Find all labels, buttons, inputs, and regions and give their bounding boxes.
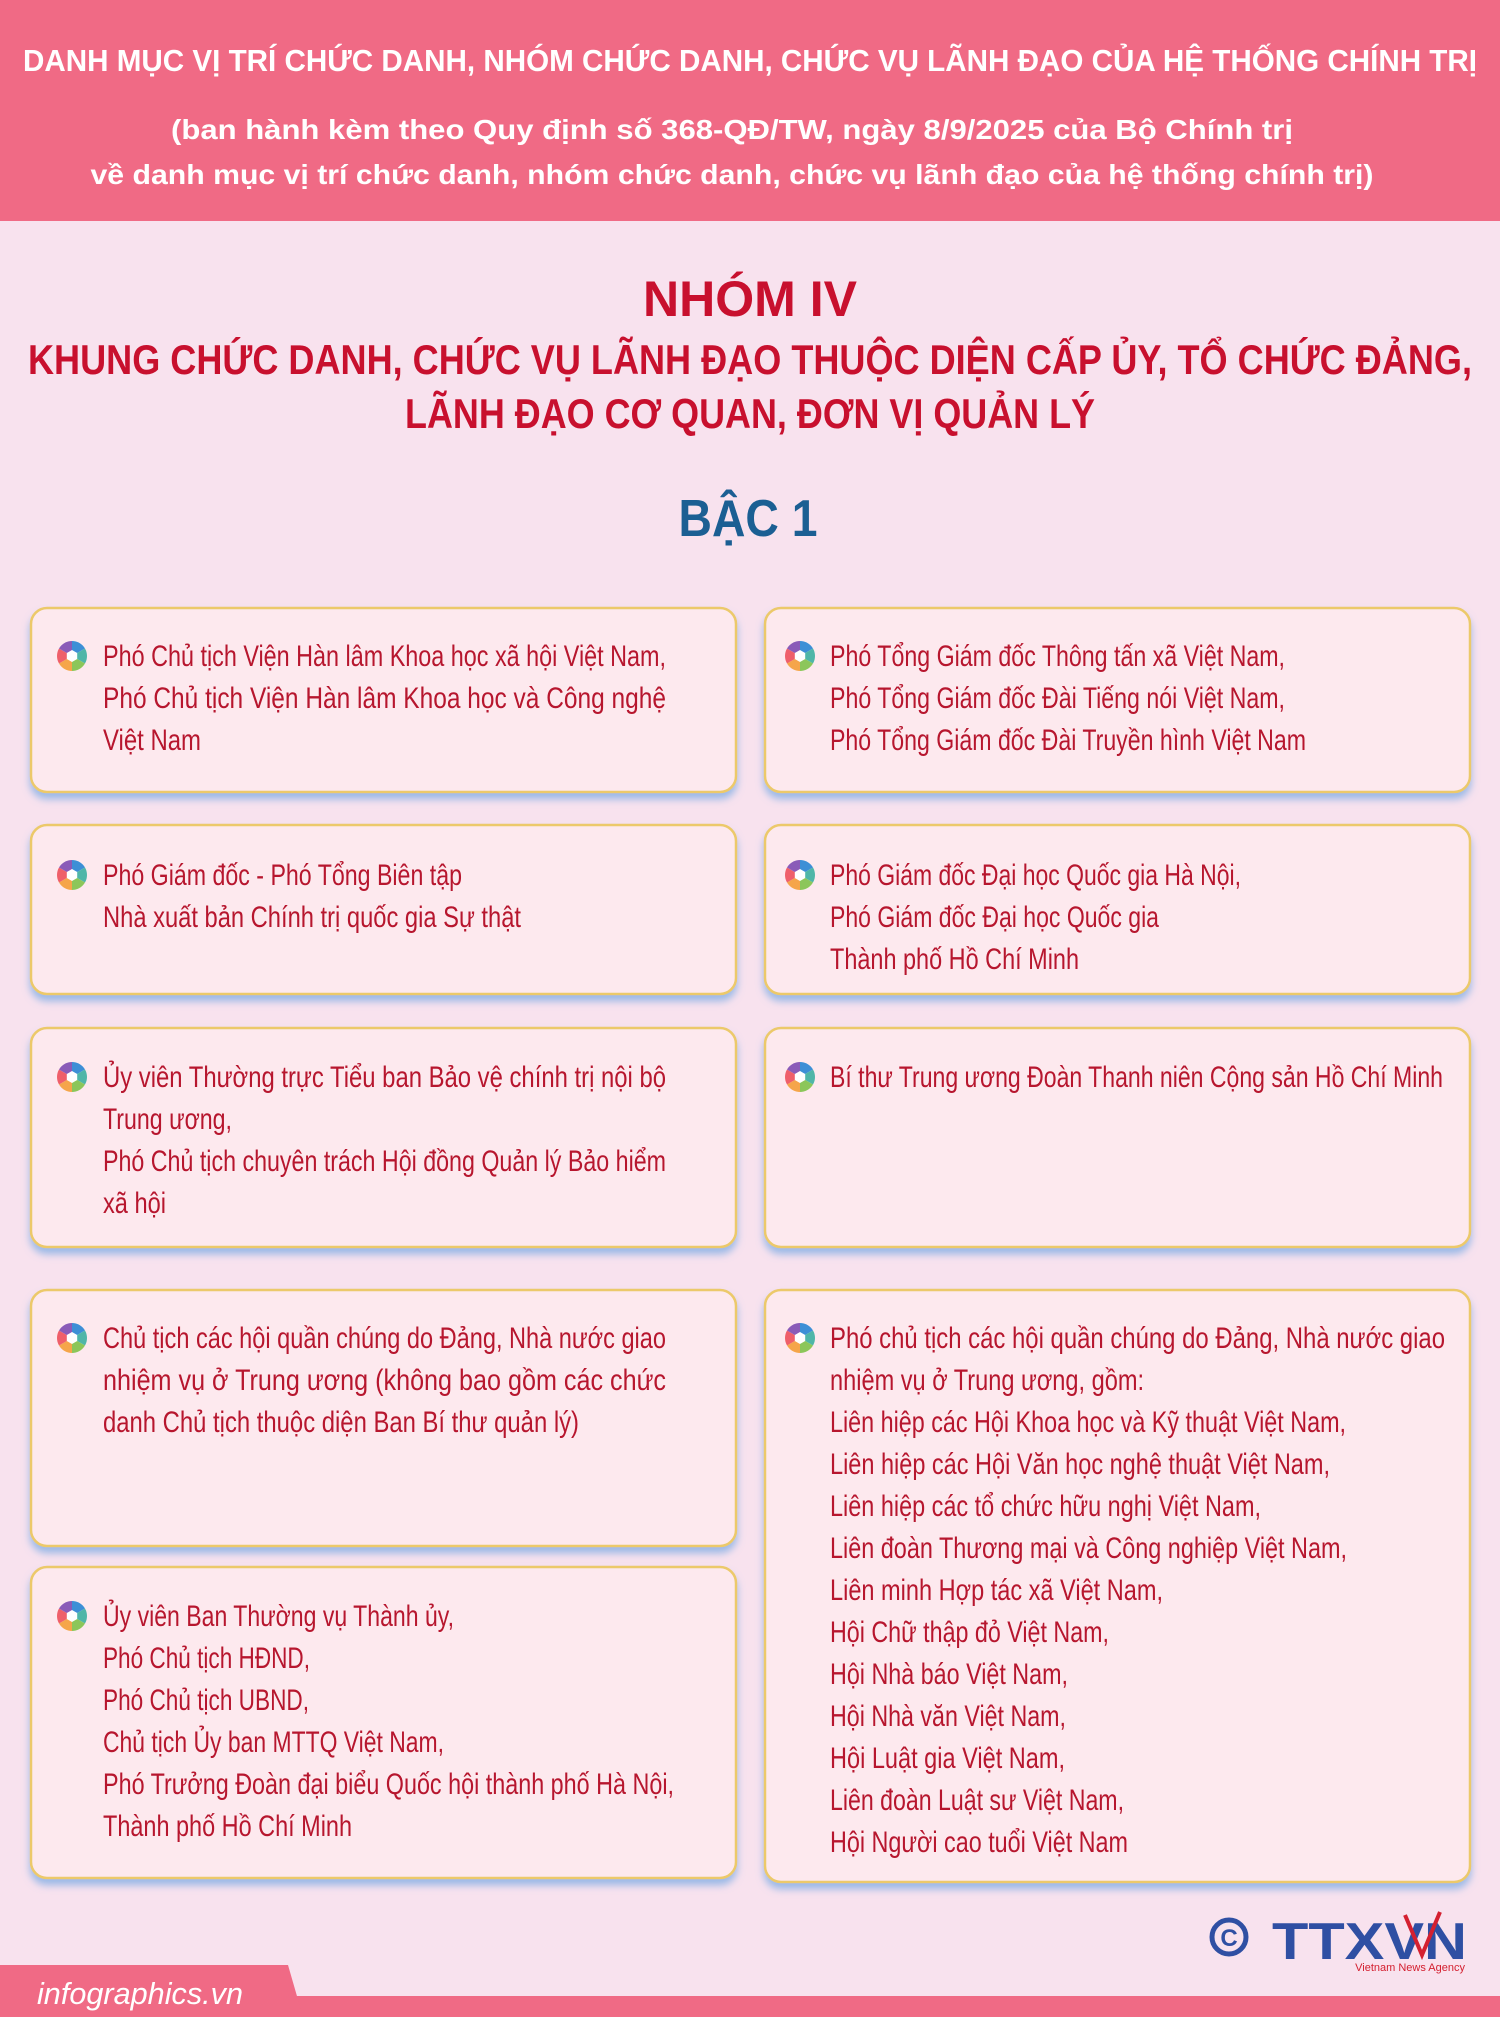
card: right tall list: Liên hiệp các Hội Văn học nghệ thuật Việt Nam, (830, 1448, 1330, 1481)
card: row5 left: Phó Chủ tịch UBND, (103, 1684, 309, 1717)
footer site text: infographics.vn (37, 1976, 243, 2011)
card: right tall list: Liên hiệp các tổ chức hữu nghị Việt Nam, (830, 1490, 1261, 1523)
card: row5 left: Chủ tịch Ủy ban MTTQ Việt Nam, (103, 1725, 444, 1759)
header title: DANH MỤC VỊ TRÍ CHỨC DANH, NHÓM CHỨC DANH, CHỨC VỤ LÃNH ĐẠO CỦA HỆ THỐNG CHÍNH TRỊ (23, 42, 1477, 78)
card: row3 left: Ủy viên Thường trực Tiểu ban Bảo vệ chính trị nội bộ (103, 1060, 666, 1094)
section heading (28, 271, 1472, 437)
card: right tall list: Liên đoàn Luật sư Việt Nam, (830, 1784, 1124, 1817)
card: row3 left: Trung ương, (103, 1103, 232, 1136)
card: row2 right: Phó Giám đốc Đại học Quốc gia Hà Nội, (830, 859, 1241, 892)
logo: TTXVN (1212, 1912, 1467, 1974)
card: row5 left: Ủy viên Ban Thường vụ Thành ủy, (103, 1599, 454, 1633)
card: right tall list: Hội Nhà báo Việt Nam, (830, 1658, 1068, 1691)
card: row2 left (31, 825, 736, 994)
card: row3 left (31, 1028, 736, 1247)
card: row2 right (765, 825, 1470, 994)
card: row3 left: xã hội (103, 1187, 166, 1220)
card: row1 left (31, 608, 736, 792)
card: right tall list: Liên minh Hợp tác xã Việt Nam, (830, 1574, 1163, 1607)
card: row5 left: Phó Chủ tịch HĐND, (103, 1642, 310, 1675)
card: row2 left: Nhà xuất bản Chính trị quốc gia Sự thật (103, 901, 522, 934)
header subtitle: về danh mục vị trí chức danh, nhóm chức danh, chức vụ lãnh đạo của hệ thống chính trị) (90, 159, 1373, 190)
card: row5 left: Thành phố Hồ Chí Minh (103, 1810, 352, 1843)
card: row1 right: Phó Tổng Giám đốc Thông tấn xã Việt Nam, (830, 640, 1285, 673)
card: row1 right: Phó Tổng Giám đốc Đài Tiếng nói Việt Nam, (830, 682, 1285, 715)
section heading: LÃNH ĐẠO CƠ QUAN, ĐƠN VỊ QUẢN LÝ (405, 389, 1095, 437)
card: right tall list: Liên đoàn Thương mại và Công nghiệp Việt Nam, (830, 1532, 1347, 1565)
card: row4 left: nhiệm vụ ở Trung ương (không bao gồm các chức (103, 1364, 666, 1397)
card: right tall list: Liên hiệp các Hội Khoa học và Kỹ thuật Việt Nam, (830, 1406, 1346, 1439)
card: right tall list: nhiệm vụ ở Trung ương, gồm: (830, 1364, 1144, 1397)
card: right tall list: Hội Chữ thập đỏ Việt Nam, (830, 1616, 1109, 1649)
card: row2 left: Phó Giám đốc - Phó Tổng Biên tập (103, 859, 462, 892)
logo: TTXVN: Vietnam News Agency (1355, 1962, 1465, 1974)
card: row1 left: Việt Nam (103, 724, 201, 757)
card: right tall list: Hội Luật gia Việt Nam, (830, 1742, 1065, 1775)
header subtitle (90, 114, 1373, 190)
card: row5 left (31, 1567, 736, 1878)
card: row1 right (765, 608, 1470, 792)
card: row1 left: Phó Chủ tịch Viện Hàn lâm Khoa học và Công nghệ (103, 682, 666, 715)
card: row3 right (765, 1028, 1470, 1247)
card: row5 left: Phó Trưởng Đoàn đại biểu Quốc hội thành phố Hà Nội, (103, 1768, 674, 1801)
card: right tall list: Hội Người cao tuổi Việt Nam (830, 1826, 1128, 1859)
header subtitle: (ban hành kèm theo Quy định số 368-QĐ/TW, ngày 8/9/2025 của Bộ Chính trị (171, 114, 1293, 145)
card: row2 right: Thành phố Hồ Chí Minh (830, 943, 1079, 976)
footer strip (0, 1965, 1500, 2017)
card: right tall list (765, 1290, 1470, 1882)
header band (0, 0, 1500, 221)
card: row1 left: Phó Chủ tịch Viện Hàn lâm Khoa học xã hội Việt Nam, (103, 640, 666, 673)
card: row3 left: Phó Chủ tịch chuyên trách Hội đồng Quản lý Bảo hiểm (103, 1145, 666, 1178)
logo: TTXVN: C (1220, 1925, 1238, 1952)
logo: TTXVN: TTXVN (1272, 1913, 1467, 1971)
card: row4 left (31, 1290, 736, 1546)
card: row2 right: Phó Giám đốc Đại học Quốc gia (830, 901, 1159, 934)
section heading: NHÓM IV (643, 271, 858, 327)
card: row4 left: Chủ tịch các hội quần chúng do Đảng, Nhà nước giao (103, 1322, 666, 1355)
card: right tall list: Hội Nhà văn Việt Nam, (830, 1700, 1066, 1733)
card: row4 left: danh Chủ tịch thuộc diện Ban Bí thư quản lý) (103, 1406, 579, 1439)
card: row1 right: Phó Tổng Giám đốc Đài Truyền hình Việt Nam (830, 724, 1306, 757)
level heading: BẬC 1 (678, 489, 818, 548)
